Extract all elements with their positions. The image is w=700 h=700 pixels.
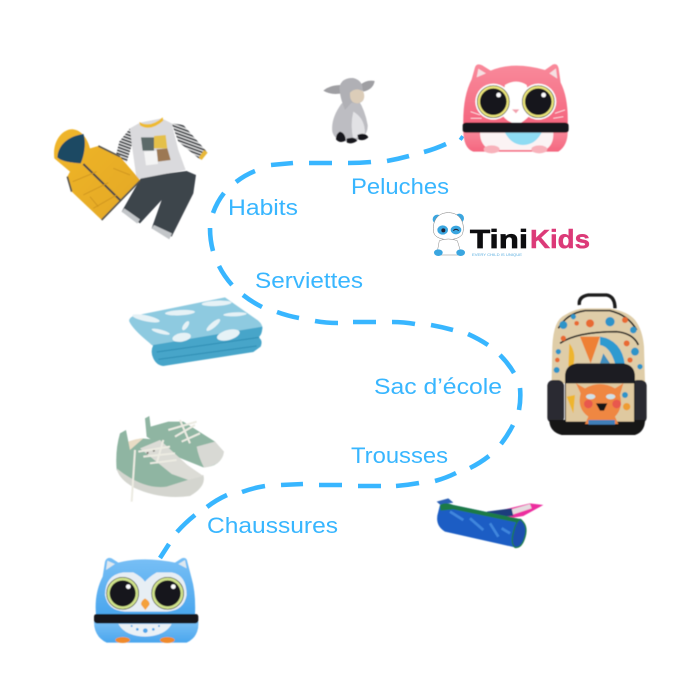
label: Sac d'école: Sac d’école [374, 374, 502, 399]
icon: clothes (vest, shirt, trousers) [54, 117, 208, 239]
wordmark Kids: Kids [530, 224, 590, 254]
icon: folded towel [129, 297, 262, 366]
label: Serviettes: Serviettes [255, 268, 363, 293]
vest [54, 129, 140, 220]
dashed route [160, 137, 520, 558]
icon: pencil case [437, 498, 543, 547]
label: Habits: Habits [228, 195, 298, 220]
trousers [122, 171, 196, 239]
icon: blue owl stamp [94, 558, 198, 643]
tagline: EVERY CHILD IS UNIQUE [472, 252, 522, 257]
icon: backpack [547, 295, 647, 435]
logo: TiniKids [433, 213, 590, 257]
icon: green baby shoes [116, 416, 224, 502]
label: Trousses: Trousses [351, 443, 448, 468]
icon: plush donkey [323, 78, 375, 143]
label: Chaussures: Chaussures [207, 513, 338, 538]
icon: panda mascot [433, 213, 465, 256]
icon: pink cat stamp [463, 64, 569, 153]
label: Peluches: Peluches [351, 174, 449, 199]
wordmark Tini: Tini [470, 224, 528, 254]
shirt [116, 117, 208, 179]
